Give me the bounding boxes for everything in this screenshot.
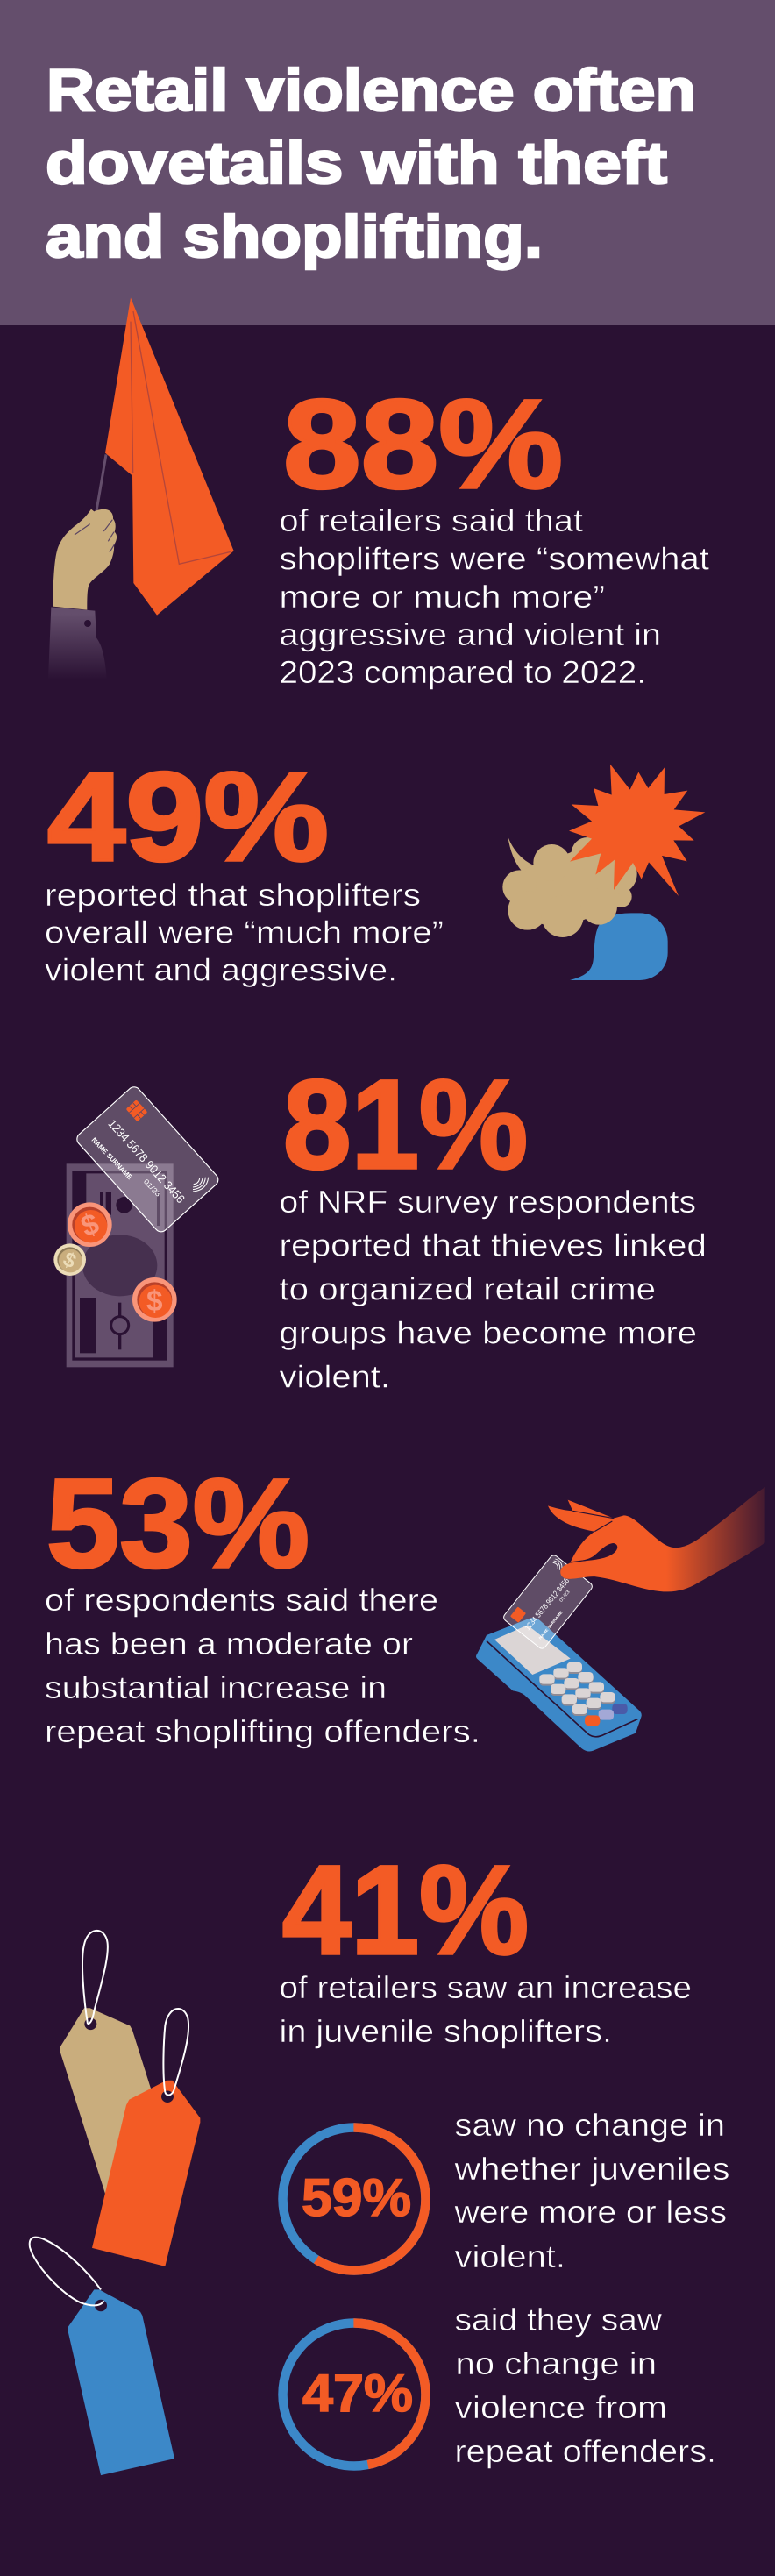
stat: 49%: reported that shoplifters [45, 877, 421, 913]
stat: 41%: of retailers saw an increase [279, 1969, 692, 2005]
icon: credit card, banknote and coins: $ [146, 1285, 163, 1318]
icon: credit card, banknote and coins [53, 1085, 221, 1367]
donut: 59%: 59% [302, 2168, 411, 2227]
stat: 53%: has been a moderate or [45, 1626, 413, 1662]
icon: hand tapping card on payment terminal: NAME SURNAME [538, 1610, 564, 1640]
icon: credit card, banknote and coins: $ [60, 1247, 80, 1272]
text: 59% description: were more or less [453, 2194, 727, 2230]
text: 47% description: said they saw [454, 2302, 663, 2338]
stat: 49% [45, 746, 444, 987]
stat: 81%: of NRF survey respondents [279, 1184, 696, 1220]
stat: 88%: aggressive and violent in [279, 616, 661, 652]
icon: credit card, banknote and coins: 01/23 [142, 1178, 163, 1199]
title: and shoplifting. [46, 203, 543, 270]
stat: 88% [279, 374, 709, 690]
stat: 88%: of retailers said that [279, 502, 583, 538]
stat: 53%: of respondents said there [45, 1582, 438, 1618]
text: 47% description [454, 2302, 716, 2469]
stat: 88%: 2023 compared to 2022. [279, 654, 646, 690]
stat: 88%: more or much more” [279, 579, 605, 615]
text: 59% description: violent. [454, 2238, 565, 2274]
stat: 81% [279, 1054, 707, 1394]
stat: 53%: 53% [46, 1453, 309, 1594]
stat: 81%: reported that thieves linked [279, 1228, 707, 1263]
stat: 41%: 41% [282, 1839, 529, 1981]
stat: 81%: violent. [279, 1359, 390, 1394]
stat: 53%: repeat shoplifting offenders. [45, 1713, 480, 1749]
stat: 53% [45, 1453, 480, 1749]
icon: credit card, banknote and coins: NAME SURNAME [90, 1136, 134, 1182]
icon: price tags [30, 1931, 200, 2475]
donut: 47%: 47% [302, 2364, 413, 2423]
title: Retail violence often [46, 57, 696, 124]
icon: hand tapping card on payment terminal [476, 1487, 765, 1752]
stat: 49%: 49% [47, 746, 329, 887]
stat: 49%: violent and aggressive. [45, 952, 397, 987]
text: 47% description: violence from [454, 2389, 667, 2425]
stat: 88%: 88% [283, 374, 563, 515]
donut: 59% [282, 2127, 426, 2271]
text: 59% description: saw no change in [454, 2107, 725, 2143]
icon: hand tapping card on payment terminal: 01/23 [558, 1590, 572, 1604]
icon: speech bubbles [502, 765, 705, 980]
icon: credit card, banknote and coins: $ [77, 1207, 103, 1243]
text: 47% description: no change in [456, 2345, 657, 2381]
stat: 49%: overall were “much more” [45, 914, 444, 950]
text: 59% description: whether juveniles [453, 2151, 729, 2187]
donut: 47% [282, 2323, 426, 2466]
stat: 88%: shoplifters were “somewhat [279, 540, 709, 577]
stat: 81%: groups have become more [279, 1315, 697, 1350]
stat: 41%: in juvenile shoplifters. [279, 2013, 612, 2049]
text: 47% description: repeat offenders. [454, 2433, 716, 2469]
stat: 53%: substantial increase in [45, 1669, 387, 1705]
header band [0, 0, 775, 325]
stat: 41% [279, 1839, 692, 2049]
icon: hand tapping card on payment terminal: 1234 5678 9012 3456 [523, 1576, 571, 1632]
icon: hand holding flag [48, 297, 234, 680]
icon: credit card, banknote and coins: 1234 5678 9012 3456 [105, 1117, 188, 1206]
title: dovetails with theft [46, 130, 667, 196]
text: 59% description [453, 2107, 729, 2274]
title [46, 57, 696, 270]
stat: 81%: to organized retail crime [279, 1271, 656, 1306]
stat: 81%: 81% [283, 1054, 528, 1195]
